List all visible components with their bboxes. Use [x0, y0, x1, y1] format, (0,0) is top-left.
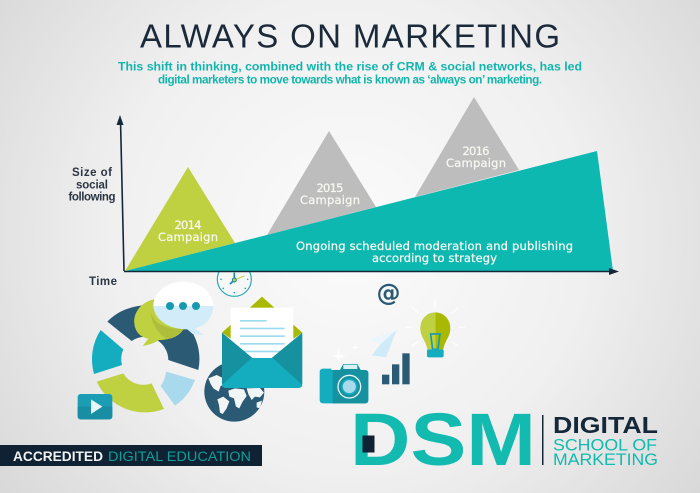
banner: accredited digital education: DIGITAL EDUCATION	[108, 449, 251, 464]
banner: accredited digital education: ACCREDITED	[13, 449, 103, 464]
logo: DSM: DIGITAL	[553, 412, 658, 438]
title: ALWAYS ON MARKETING	[140, 18, 560, 54]
y axis label: following	[68, 192, 116, 204]
x axis label: Time	[89, 276, 117, 288]
icon: globe	[204, 362, 264, 422]
icon: donut chart	[92, 305, 199, 412]
icon: camera	[320, 343, 368, 403]
logo: DSM: MARKETING	[553, 451, 658, 469]
arrow: horizontal axis	[124, 268, 619, 275]
triangle: 2015 campaign: 2015	[316, 181, 344, 195]
teal ongoing wedge	[125, 151, 613, 271]
banner: accredited digital education	[0, 445, 262, 466]
icon: light bulb	[405, 299, 465, 357]
triangle: 2014 campaign: 2014	[174, 218, 202, 232]
icon: at sign: @	[376, 279, 400, 307]
icon: envelope	[222, 297, 302, 388]
triangle: 2016 campaign	[415, 97, 519, 197]
subtitle: This shift in thinking, combined with the rise of CRM & social networks, has led	[118, 60, 582, 74]
y axis label: social	[76, 180, 108, 192]
chart: always on campaigns	[116, 97, 619, 275]
logo: DSM: SCHOOL OF	[553, 436, 657, 454]
arrow: vertical axis	[116, 115, 124, 271]
triangle: 2016 campaign: 2016	[462, 144, 490, 158]
icon: bar chart	[382, 353, 410, 384]
teal ongoing wedge: according to strategy	[372, 251, 497, 265]
icon: play button	[78, 394, 112, 419]
triangle: 2015 campaign	[267, 131, 376, 235]
triangle: 2014 campaign: Campaign	[158, 230, 218, 244]
y axis label	[68, 167, 116, 204]
triangle: 2014 campaign	[125, 167, 235, 271]
subtitle	[118, 60, 582, 86]
triangle: 2016 campaign: Campaign	[446, 156, 506, 170]
icon: paper plane	[369, 330, 397, 357]
subtitle: digital marketers to move towards what is known as ‘always on’ marketing.	[158, 74, 542, 86]
y axis label: Size of	[72, 167, 112, 179]
logo: DSM: DSM	[350, 398, 536, 481]
teal ongoing wedge: Ongoing scheduled moderation and publishing	[296, 239, 573, 253]
icon: clock	[217, 262, 251, 296]
icon: speech bubbles	[134, 282, 213, 346]
triangle: 2015 campaign: Campaign	[300, 193, 360, 207]
logo: DSM	[350, 398, 658, 481]
